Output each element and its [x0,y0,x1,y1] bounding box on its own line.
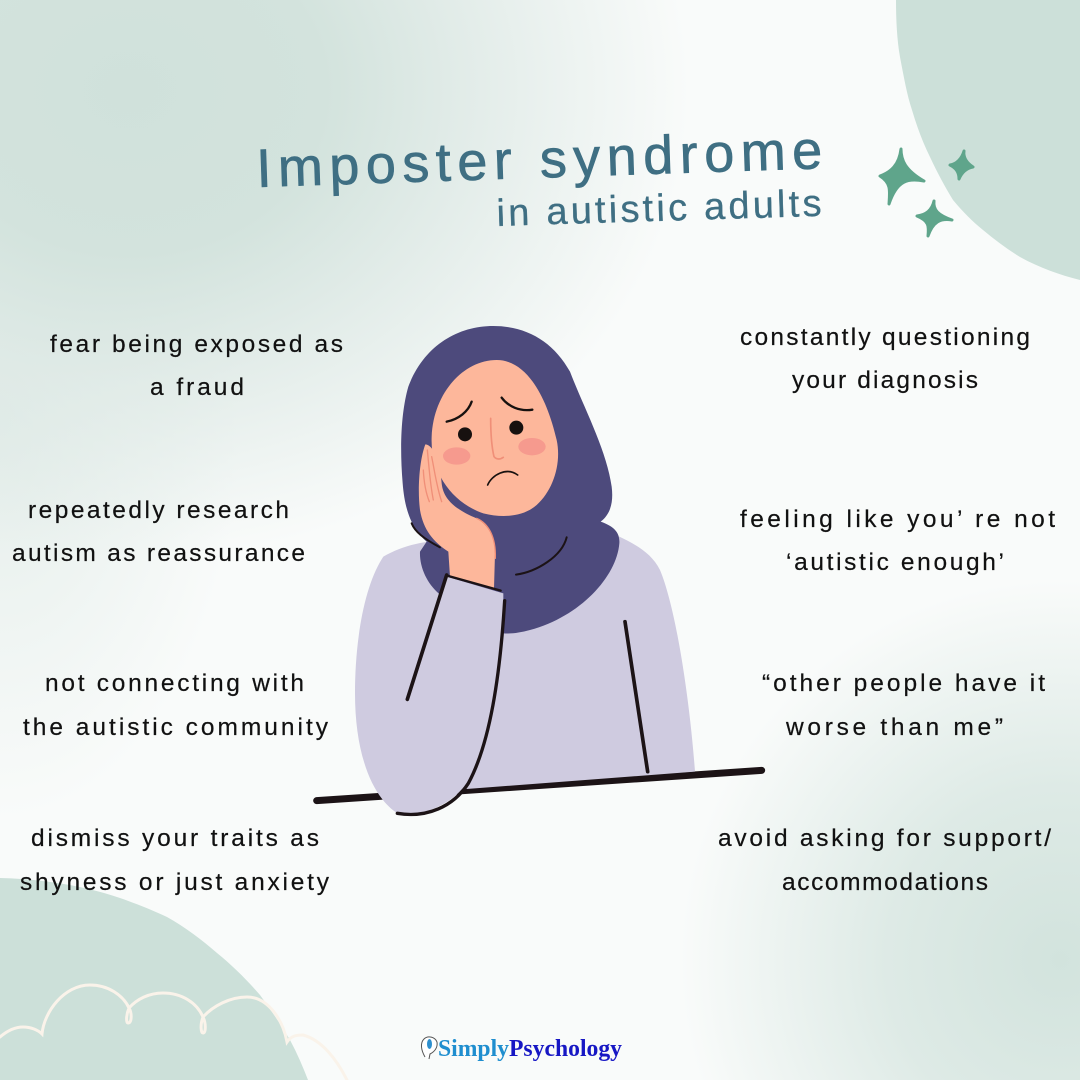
logo wordmark: SimplyPsychology [438,1036,622,1062]
illustration: worried woman at desk [317,326,762,814]
text: repeatedly research [12,497,305,567]
text: repeatedly research: repeatedly research [28,497,289,524]
text: repeatedly research: autism as reassurance [12,540,305,567]
text: not autistic enough: feeling like you’ re not [740,506,1055,533]
sweater [355,537,695,814]
text: constantly questioning: constantly questioning [740,324,1030,351]
text: not connecting [23,670,329,741]
text: fear being exposed: fear being exposed as [50,331,343,358]
cheeks [443,438,546,465]
text: avoid asking for support: avoid asking for support/ [718,825,1051,852]
icon: sparkles [880,149,973,236]
logo: Simply Psychology [421,1036,622,1062]
text: not connecting: the autistic community [23,714,329,741]
corner shape: bottom left with cloud outline [0,878,347,1080]
hand and neck [419,444,495,588]
text: fear being exposed [50,331,343,401]
title: Imposter syndrome [255,120,823,199]
eyes [458,421,523,441]
text: not autistic enough [740,506,1055,576]
text: dismiss your traits [20,825,330,896]
text: other people have it worse [762,670,1045,741]
text: avoid asking for support [718,825,1051,896]
text: other people have it worse: worse than me” [785,714,1003,741]
text: not connecting: not connecting with [45,670,304,697]
text: avoid asking for support: accommodations [782,869,988,896]
text: constantly questioning: your diagnosis [792,367,978,394]
text: not autistic enough: ‘autistic enough’ [786,549,1004,576]
text: dismiss your traits: shyness or just anxiety [20,869,330,896]
text: constantly questioning [740,324,1030,394]
text: dismiss your traits: dismiss your traits as [31,825,319,852]
eyebrows, nose and mouth [447,398,532,485]
icon: head with bulb [421,1037,437,1059]
hijab [401,326,619,634]
subtitle: in autistic adults [496,183,822,235]
corner shape: top right [896,0,1080,280]
text: fear being exposed: a fraud [150,374,244,401]
face [432,360,558,516]
clothing lines [397,523,648,814]
desk line [317,770,762,801]
text: other people have it worse: “other people have it [762,670,1045,697]
hand finger lines [423,450,495,558]
